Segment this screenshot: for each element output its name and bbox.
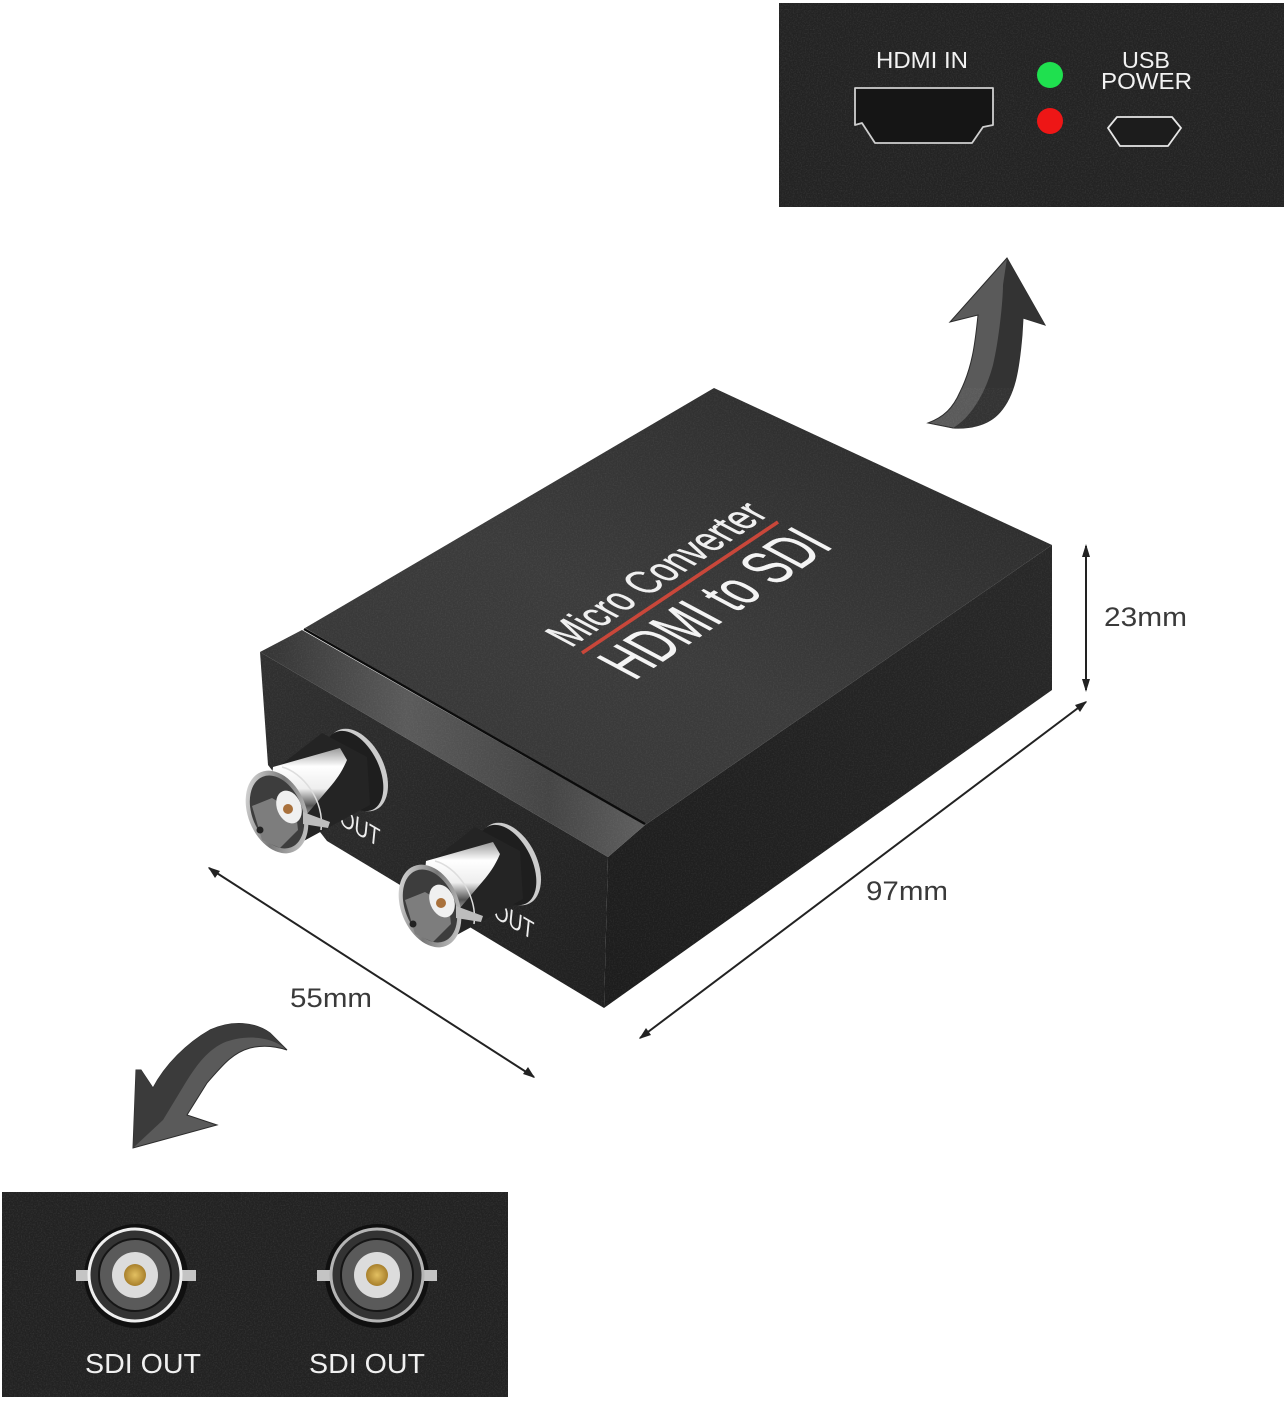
arrow: down to SDI panel (133, 1024, 287, 1148)
label: SDI OUT right: SDI OUT (309, 1348, 425, 1379)
BNC connector 1 (234, 719, 401, 863)
dimension: length 97mm: 97mm (866, 876, 948, 906)
top face (305, 388, 1052, 825)
dimension: width 55mm (208, 867, 535, 1078)
BNC connector 2 (387, 813, 554, 957)
SDI port 1 (76, 1224, 196, 1328)
SDI port 2 (317, 1224, 437, 1328)
product label: Micro Converter: Micro Converter (534, 495, 779, 653)
label: USB POWER: USB (1122, 47, 1170, 73)
product label: HDMI to SDI: HDMI to SDI (581, 518, 847, 688)
red LED (1037, 108, 1063, 134)
panel: SDI outputs end view (2, 1192, 508, 1397)
panel: HDMI and USB power end view (779, 3, 1284, 207)
label: HDMI IN: HDMI IN (876, 47, 968, 73)
converter device (234, 388, 1052, 1008)
dimension: height 23mm: 23mm (1104, 602, 1187, 632)
dimension: length 97mm (639, 701, 1087, 1039)
green LED (1037, 62, 1063, 88)
label: SDI OUT left: SDI OUT (85, 1348, 201, 1379)
arrow: up to HDMI panel (928, 258, 1045, 428)
front lip (260, 630, 645, 857)
micro USB port (1108, 117, 1181, 146)
front face (260, 652, 608, 1008)
HDMI port (855, 88, 993, 143)
label: second OUT: OUT (492, 895, 535, 946)
dimension: width 55mm: 55mm (290, 983, 372, 1013)
dimension: height 23mm (1082, 544, 1187, 692)
right side face (604, 545, 1052, 1008)
label: USB POWER: POWER (1101, 68, 1192, 94)
red rule (582, 522, 778, 653)
label: first OUT: OUT (338, 802, 381, 853)
